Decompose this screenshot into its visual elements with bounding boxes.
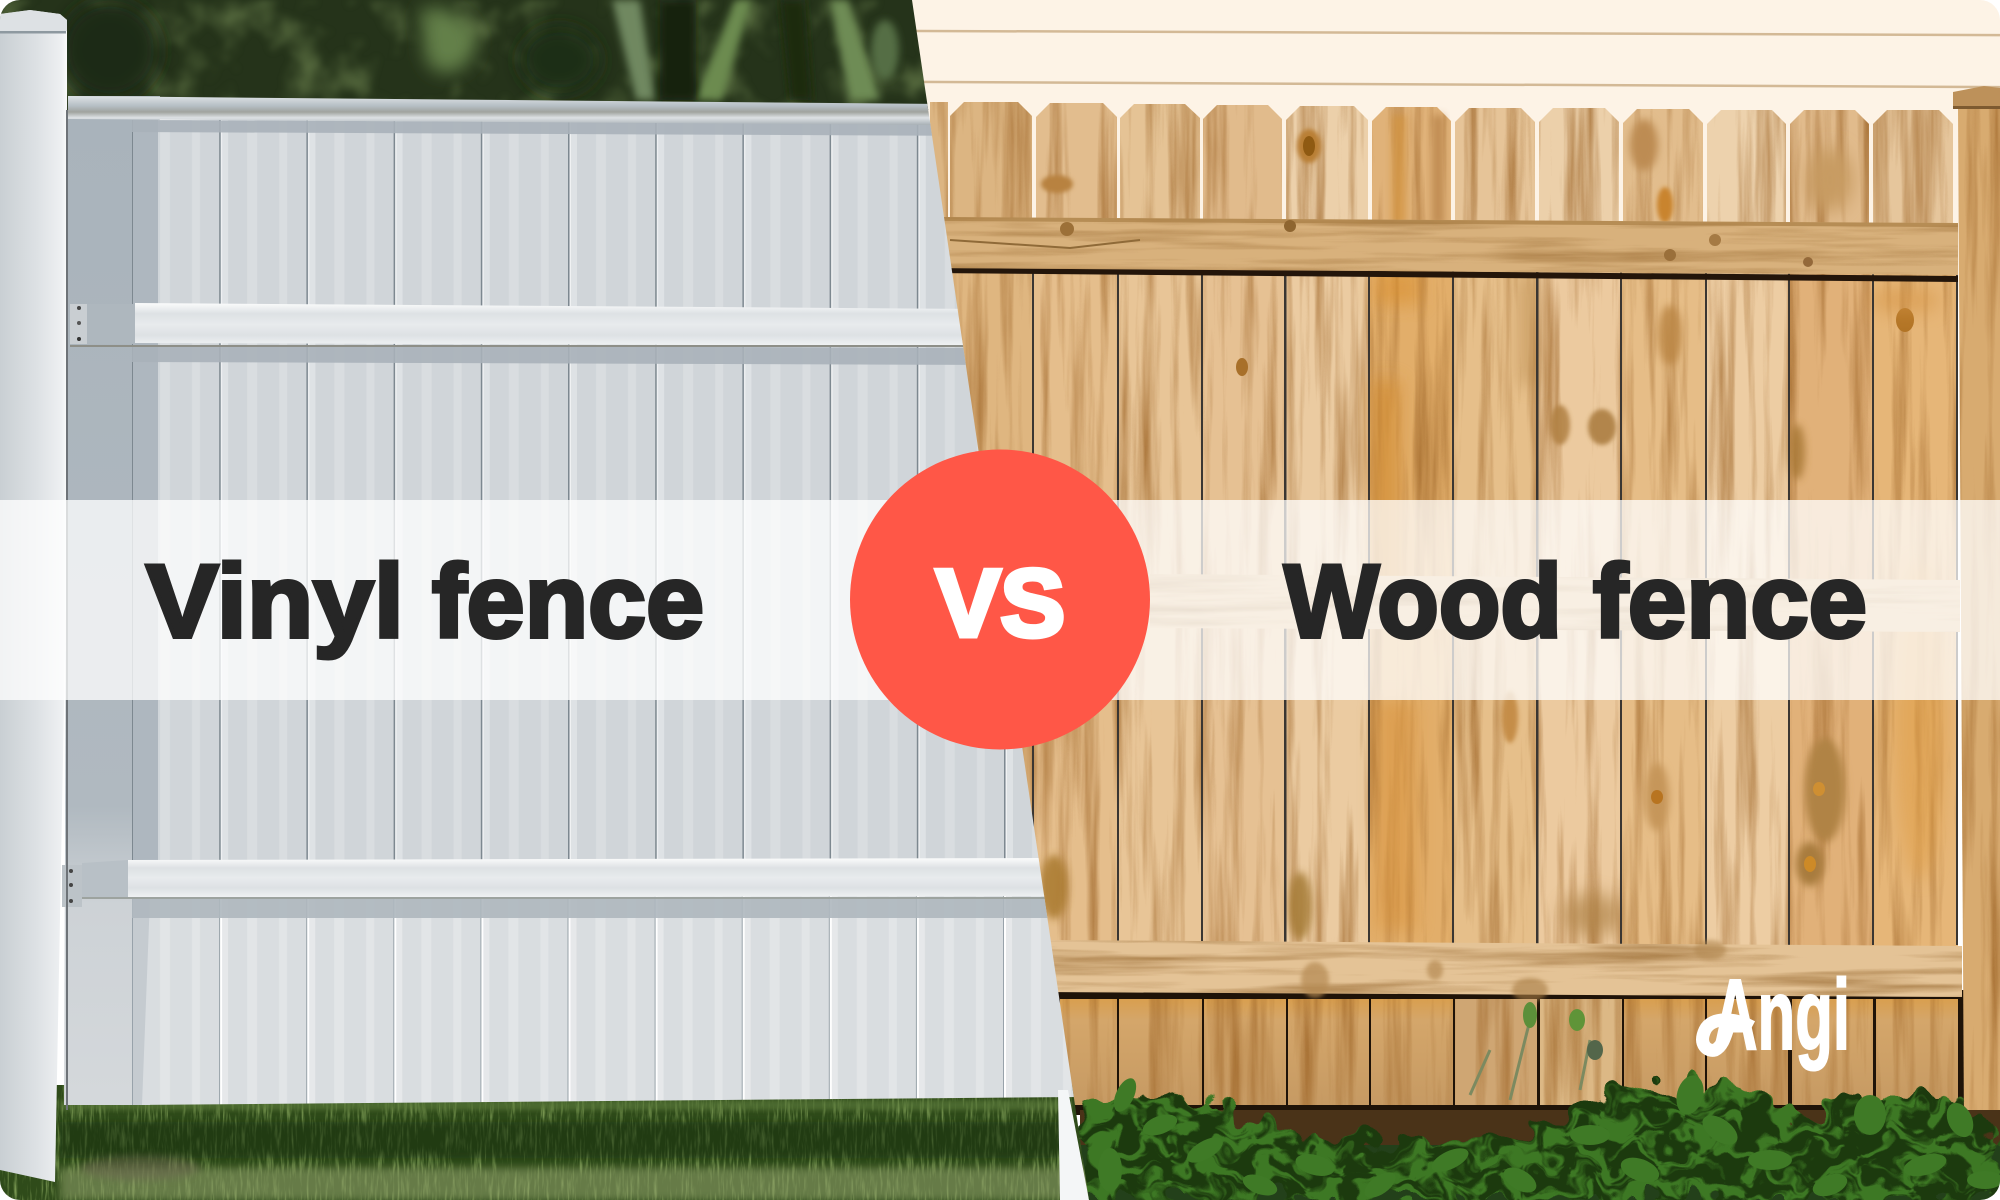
- photo: vinyl fence: [0, 0, 1100, 1200]
- dark foliage background: [0, 0, 1000, 110]
- vinyl panel: lower: [132, 895, 1080, 1105]
- knots on upper pickets: [1041, 115, 1852, 225]
- badge: VS circle: [850, 450, 1150, 750]
- bottom boards: [1060, 999, 1958, 1105]
- heading: Wood fence: fence: [1593, 544, 1867, 660]
- upper picket tops: [930, 102, 1953, 230]
- logo: Angi: [1696, 976, 1846, 1072]
- house siding: [880, 0, 2000, 300]
- stains and knots on boards: [1040, 270, 1946, 940]
- board gaps: [1032, 270, 1958, 945]
- vinyl panel: middle: [132, 340, 1092, 865]
- vinyl top rail: [68, 96, 940, 125]
- main vertical boards: [930, 270, 1958, 950]
- vinyl lower rail: [62, 858, 1060, 907]
- middle wood rail: [1150, 574, 1960, 632]
- lower wood rail: [1040, 940, 1970, 1115]
- vinyl panel: upper: [132, 120, 1032, 310]
- heading: Wood fence: [1282, 560, 1866, 640]
- heading: Wood fence: Wood: [1284, 544, 1562, 660]
- right wood post: [1953, 86, 2000, 1135]
- translucent banner: [0, 500, 2000, 700]
- photo: wood fence: [880, 0, 2000, 1200]
- badge: VS circle: VS: [936, 550, 1065, 657]
- grass: [0, 1085, 1100, 1200]
- heading: Vinyl fence: fence: [432, 544, 704, 660]
- heading: Vinyl fence: Vinyl: [146, 544, 404, 660]
- left column of panel: [64, 96, 160, 1105]
- white corner post sliver: [1058, 1090, 1089, 1200]
- heading: Vinyl fence: [144, 560, 702, 660]
- vinyl post, left: [0, 10, 68, 1182]
- soil and weeds: [1070, 1002, 2000, 1200]
- vinyl middle rail: [70, 303, 990, 347]
- logo: Angi: Angi: [1713, 959, 1850, 1071]
- upper wood rail: [930, 217, 1958, 282]
